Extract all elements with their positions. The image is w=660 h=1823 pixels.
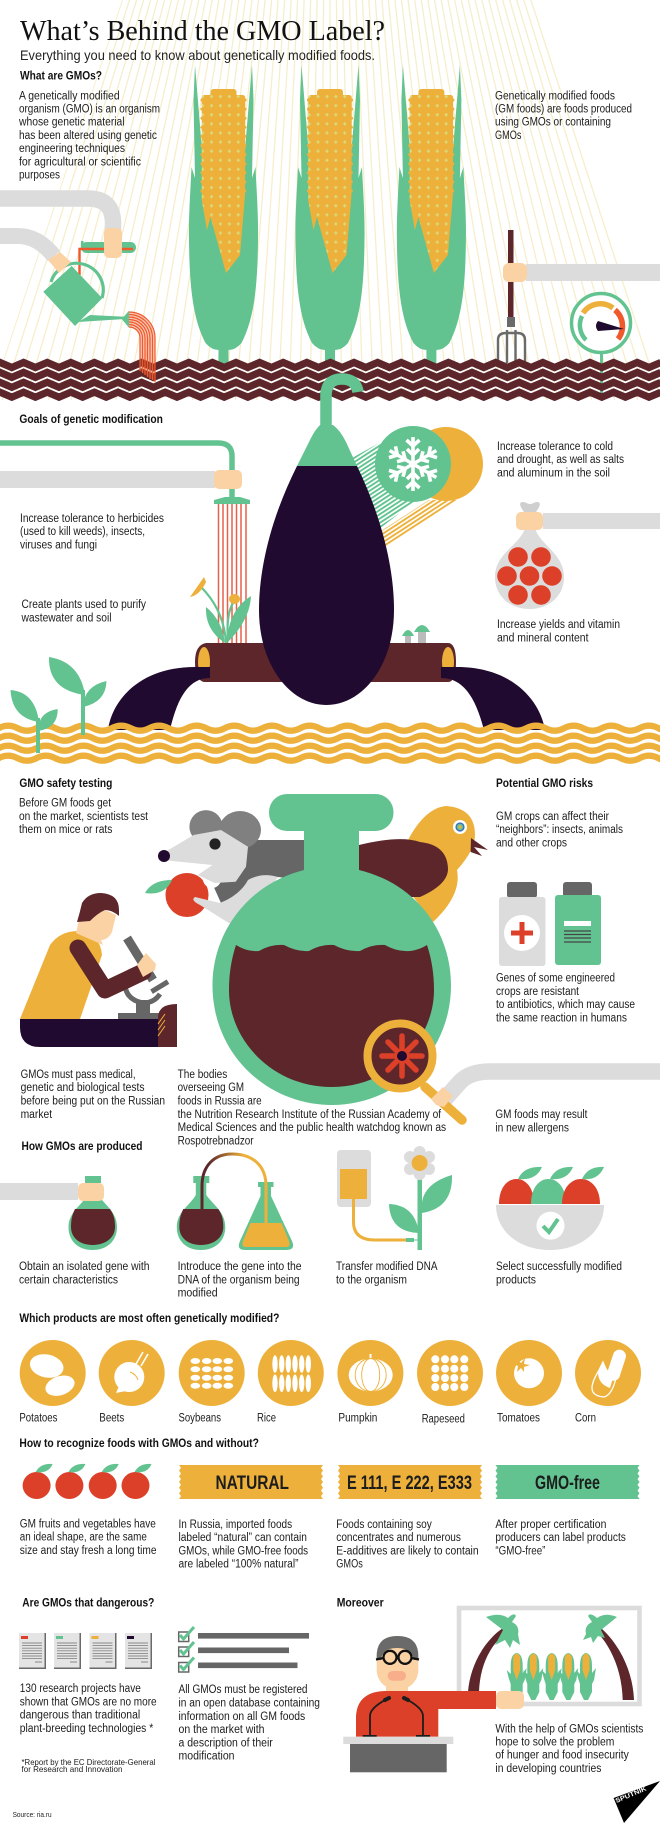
- text block: hunger: in developing countries: [495, 1763, 602, 1775]
- illustration: presentation board: [459, 1608, 640, 1704]
- text block: allergens: GM foods may result: [495, 1109, 588, 1121]
- text block: research: dangerous than traditional: [20, 1710, 140, 1722]
- soil zigzag: [0, 362, 660, 397]
- illustration: arm with pitchfork: [498, 230, 660, 363]
- text block: research: [20, 1683, 157, 1735]
- text block: GMO definition: A genetically modified: [19, 90, 120, 102]
- step captions: modified: [178, 1288, 218, 1300]
- product labels: Soybeans: [178, 1413, 221, 1425]
- product labels: [19, 1413, 596, 1426]
- recognize captions: GMOs: [336, 1559, 363, 1571]
- text block: cold tolerance: and drought, as well as salts: [497, 454, 624, 466]
- text block: hunger: of hunger and food insecurity: [495, 1750, 629, 1762]
- step captions: [19, 1261, 622, 1300]
- step 4: bowl of apples: [496, 1167, 604, 1250]
- illustration: gauge: [572, 294, 630, 395]
- icon: snowflake: [386, 437, 440, 491]
- recognize captions: “GMO-free”: [495, 1546, 546, 1558]
- product labels: Rice: [257, 1413, 276, 1425]
- icon: research documents: [19, 1633, 152, 1669]
- text block: allergens: [495, 1109, 588, 1134]
- text block: hunger: [495, 1723, 644, 1775]
- text block: purify: Create plants used to purify: [22, 599, 146, 611]
- text block: GM foods definition: [495, 90, 632, 142]
- text block: GMO definition: for agricultural or scientific: [19, 156, 141, 168]
- text block: registration: modification: [178, 1750, 234, 1762]
- source: Source: ria.ru: [13, 1810, 52, 1819]
- text block: antibiotics: the same reaction in humans: [496, 1012, 627, 1024]
- text block: purify: [21, 599, 146, 624]
- recognize captions: concentrates and numerous: [336, 1532, 461, 1544]
- step captions: Transfer modified DNA: [336, 1261, 438, 1273]
- text block: hunger: hope to solve the problem: [495, 1736, 614, 1748]
- step captions: Select successfully modified: [496, 1261, 622, 1273]
- icon: rice: [258, 1340, 324, 1406]
- text block: registration: in an open database containing: [178, 1698, 320, 1710]
- tag: E-numbers: E 111, E 222, E333: [347, 1473, 472, 1494]
- illustration: scientist at microscope: [20, 893, 177, 1047]
- text block: neighbors: GM crops can affect their: [496, 811, 609, 823]
- footnote: *Report by the EC Directorate-General: [22, 1757, 156, 1767]
- text block: oversight bodies: [178, 1069, 446, 1147]
- text block: GMO definition: whose genetic material: [18, 117, 125, 129]
- text block: cold tolerance: and aluminum in the soil: [497, 467, 610, 479]
- icon: row of apples: [23, 1464, 151, 1499]
- text block: research: shown that GMOs are no more: [20, 1696, 157, 1708]
- recognize captions: GM fruits and vegetables have: [20, 1518, 156, 1530]
- text block: registration: All GMOs must be registered: [178, 1684, 308, 1696]
- text block: oversight bodies: Rospotrebnadzor: [178, 1135, 254, 1147]
- text block: neighbors: and other crops: [496, 837, 567, 849]
- text block: allergens: in new allergens: [495, 1122, 569, 1134]
- recognize captions: size and stay fresh a long time: [20, 1545, 156, 1557]
- text block: registration: a description of their: [178, 1737, 273, 1749]
- text block: medical tests: GMOs must pass medical,: [21, 1069, 136, 1081]
- text block: hunger: With the help of GMOs scientists: [495, 1723, 644, 1735]
- text block: oversight bodies: The bodies: [178, 1069, 228, 1081]
- text block: herbicides: viruses and fungi: [20, 539, 97, 551]
- recognize captions: E-additives are likely to contain: [336, 1546, 479, 1558]
- step captions: certain characteristics: [19, 1274, 118, 1286]
- icon: pumpkin: [337, 1340, 403, 1406]
- text block: herbicides: [20, 513, 164, 551]
- heading: what are GMOs: What are GMOs?: [20, 68, 102, 82]
- text block: neighbors: “neighbors”: insects, animals: [496, 824, 623, 836]
- step captions: Introduce the gene into the: [178, 1261, 302, 1273]
- heading: how produced: How GMOs are produced: [22, 1139, 142, 1153]
- illustration: seedlings: [10, 657, 106, 753]
- syringe: [80, 241, 136, 275]
- title: What’s Behind the GMO Label?: [20, 16, 385, 47]
- illustration: cold and sun rays: [352, 426, 483, 547]
- text block: research: plant-breeding technologies *: [20, 1723, 154, 1735]
- text block: oversight bodies: the Nutrition Research Institute of the Russian Academy of: [178, 1109, 442, 1121]
- footnote: for Research and Innovation: [22, 1764, 123, 1774]
- step captions: DNA of the organism being: [178, 1274, 300, 1286]
- illustration: arm with shower: [0, 443, 250, 643]
- text block: testing on mice: Before GM foods get: [19, 798, 112, 810]
- text block: testing on mice: [19, 798, 149, 836]
- text block: medical tests: market: [21, 1109, 53, 1121]
- text block: oversight bodies: overseeing GM: [178, 1082, 244, 1094]
- illustration: mushrooms: [402, 625, 430, 643]
- water stream: [129, 312, 155, 382]
- icon: tomato: [496, 1340, 562, 1406]
- tag: GMO-free: GMO-free: [535, 1473, 600, 1494]
- text block: cold tolerance: Increase tolerance to cold: [497, 441, 613, 453]
- product labels: Potatoes: [19, 1413, 58, 1425]
- illustration: eggplant: [259, 379, 394, 705]
- text block: GM foods definition: Genetically modified foods: [495, 90, 615, 102]
- step captions: to the organism: [336, 1274, 407, 1286]
- step captions: Obtain an isolated gene with: [19, 1261, 150, 1273]
- microscope: [118, 938, 168, 1019]
- heading: safety testing: GMO safety testing: [19, 776, 112, 790]
- text block: oversight bodies: foods in Russia are: [178, 1096, 262, 1108]
- recognize captions: labeled “natural” can contain: [178, 1532, 307, 1544]
- text block: GMO definition: purposes: [19, 170, 60, 182]
- heading: goals: Goals of genetic modification: [19, 412, 163, 426]
- text block: yields: and mineral content: [497, 632, 589, 644]
- apple: [145, 870, 221, 917]
- product labels: Corn: [575, 1413, 596, 1425]
- text block: GM foods definition: GMOs: [495, 130, 522, 142]
- watering can: [43, 263, 129, 328]
- illustration: bottles: [499, 882, 601, 966]
- text block: GM foods definition: using GMOs or containing: [495, 117, 611, 129]
- text block: registration: on the market with: [178, 1724, 264, 1736]
- text block: purify: wastewater and soil: [21, 612, 112, 624]
- recognize captions: are labeled “100% natural”: [178, 1559, 299, 1571]
- heading: dangerous: Are GMOs that dangerous?: [22, 1596, 154, 1610]
- illustration: mouse with apple: [145, 810, 304, 930]
- illustration: log with drains: [108, 643, 545, 730]
- heading: risks: Potential GMO risks: [496, 776, 593, 790]
- recognize captions: producers can label products: [495, 1532, 626, 1544]
- recognize captions: [20, 1518, 626, 1571]
- icon: rapeseed: [417, 1340, 483, 1406]
- text block: research: 130 research projects have: [20, 1683, 141, 1695]
- subtitle: Everything you need to know about genetically modified foods.: [20, 47, 375, 63]
- icon: beets: [99, 1340, 165, 1406]
- product labels: Pumpkin: [338, 1413, 377, 1425]
- step 3: IV bag and plant: [337, 1146, 452, 1250]
- step 2: two flasks with tube: [177, 1154, 293, 1250]
- product circles: [20, 1340, 641, 1406]
- recognize captions: After proper certification: [495, 1519, 606, 1531]
- illustration: magnifier with arm: [368, 1024, 660, 1120]
- product labels: Rapeseed: [422, 1414, 465, 1426]
- text block: antibiotics: Genes of some engineered: [496, 973, 615, 985]
- heading: products: Which products are most often genetically modified?: [19, 1311, 279, 1325]
- text block: registration: information on all GM foods: [178, 1711, 305, 1723]
- text block: medical tests: before being put on the Russian: [21, 1096, 165, 1108]
- icon: corn: [575, 1340, 641, 1406]
- text block: medical tests: genetic and biological tests: [21, 1082, 145, 1094]
- step 1: flask with arm: [0, 1176, 117, 1250]
- product labels: Tomatoes: [497, 1413, 540, 1425]
- product labels: Beets: [99, 1413, 124, 1425]
- wavy yellow ground: [0, 726, 660, 761]
- footnote: [22, 1757, 156, 1774]
- recognize captions: an ideal shape, are the same: [20, 1532, 147, 1544]
- tag: natural: [179, 1465, 323, 1499]
- tag: natural: NATURAL: [216, 1473, 289, 1494]
- step captions: products: [496, 1274, 536, 1286]
- text block: GMO definition: has been altered using genetic: [19, 130, 157, 142]
- text block: antibiotics: [496, 973, 635, 1024]
- text block: GMO definition: organism (GMO) is an organism: [19, 104, 160, 116]
- text block: testing on mice: on the market, scientists test: [19, 811, 149, 823]
- text block: cold tolerance: [497, 441, 624, 479]
- text block: GMO definition: [18, 90, 160, 182]
- icon: potatoes: [20, 1340, 86, 1406]
- icon: soybeans: [179, 1340, 245, 1406]
- text block: herbicides: (used to kill weeds), insects,: [20, 526, 145, 538]
- text block: testing on mice: them on mice or rats: [19, 824, 113, 836]
- icon: checklist: [179, 1627, 309, 1672]
- illustration: presenter at podium: [343, 1636, 524, 1772]
- text block: neighbors: [496, 811, 623, 849]
- illustration: flask: [212, 794, 451, 1105]
- illustration: bird: [359, 806, 488, 922]
- illustration: flower plant: [190, 577, 251, 643]
- illustration: arm holding bag of tomatoes: [495, 502, 660, 609]
- heading: moreover: Moreover: [337, 1596, 384, 1610]
- illustration: three corn plants: [189, 65, 466, 365]
- heading: recognize: How to recognize foods with GMOs and without?: [19, 1436, 259, 1450]
- tag: GMO-free: [496, 1465, 640, 1499]
- text block: yields: Increase yields and vitamin: [497, 619, 620, 631]
- text block: herbicides: Increase tolerance to herbicides: [20, 513, 164, 525]
- recognize captions: GMOs, while GMO-free foods: [178, 1546, 308, 1558]
- text block: yields: [497, 619, 620, 644]
- text block: registration: [178, 1684, 320, 1762]
- logo: sputnik: [614, 1781, 660, 1823]
- recognize captions: In Russia, imported foods: [178, 1519, 292, 1531]
- text block: medical tests: [21, 1069, 165, 1121]
- text block: oversight bodies: Medical Sciences and the public health watchdog known as: [178, 1122, 446, 1134]
- text block: GM foods definition: (GM foods) are foods produced: [495, 104, 632, 116]
- illustration: arms with watering can and syringe: [0, 198, 136, 328]
- recognize captions: Foods containing soy: [336, 1519, 432, 1531]
- tag: E-numbers: [338, 1465, 482, 1499]
- text block: antibiotics: to antibiotics, which may cause: [496, 999, 635, 1011]
- logo: sputnik: SPUTNIK: [615, 1785, 648, 1805]
- text block: GMO definition: engineering techniques: [19, 143, 125, 155]
- text block: antibiotics: crops are resistant: [496, 986, 580, 998]
- background sun rays: [0, 0, 660, 176]
